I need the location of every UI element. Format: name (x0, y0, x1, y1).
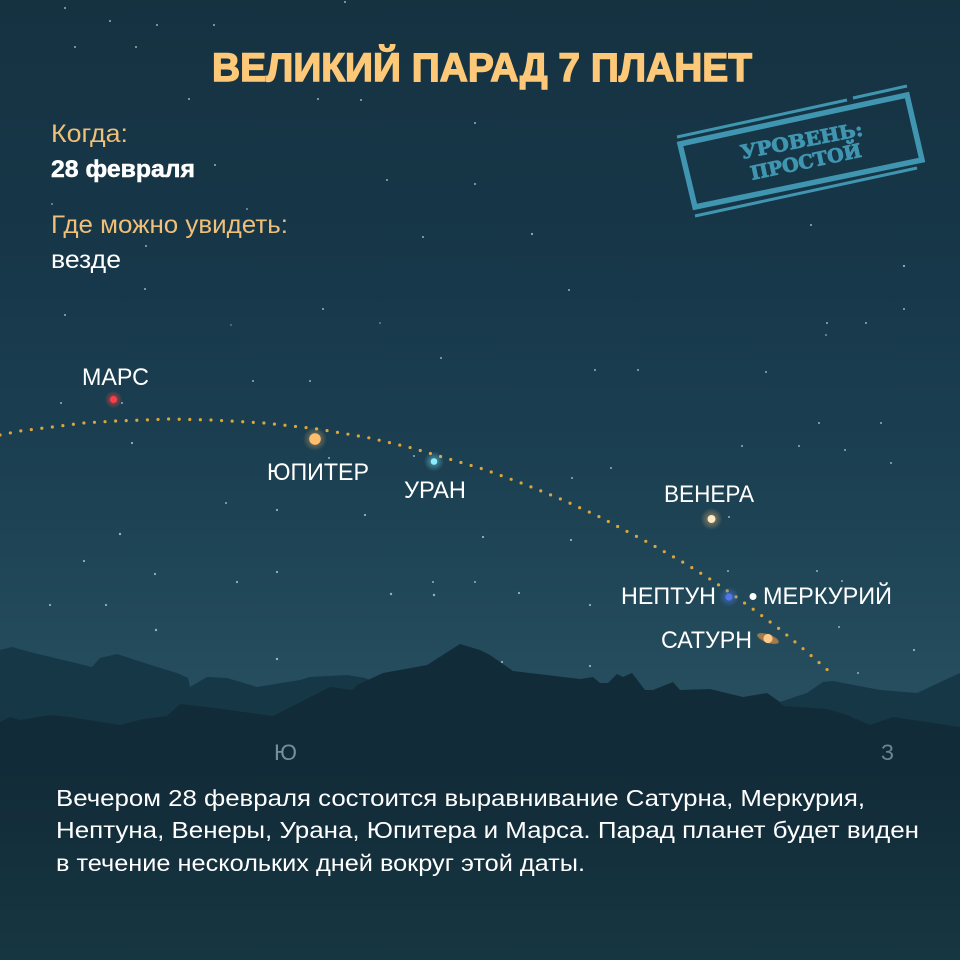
planet: Saturn (661, 627, 780, 654)
where block (51, 211, 288, 274)
label: Neptune: НЕПТУН (621, 583, 716, 610)
description paragraph (56, 785, 919, 876)
label: Jupiter: ЮПИТЕР (267, 459, 369, 486)
mountains: back layer (0, 647, 960, 760)
direction label: south: Ю (274, 740, 297, 765)
when block (51, 120, 195, 183)
planet: Uranus (404, 452, 466, 504)
planet: Neptune (621, 583, 739, 610)
planet: Mercury (750, 582, 892, 610)
when label: Когда: (51, 120, 128, 148)
when value: 28 февраля (51, 156, 195, 183)
label: Mars: МАРС (82, 364, 149, 391)
description paragraph: Нептуна, Венеры, Урана, Юпитера и Марса. Парад планет будет виден (56, 817, 919, 843)
ecliptic dotted arc (0, 419, 831, 673)
where label: Где можно увидеть: (51, 211, 288, 239)
stamp frame (680, 95, 922, 207)
stamp rules (677, 86, 917, 216)
planet: Jupiter (267, 427, 369, 486)
label: Venus: ВЕНЕРА (664, 481, 754, 508)
direction label: west: З (881, 740, 894, 765)
stamp text line 1: УРОВЕНЬ: (739, 119, 865, 164)
description paragraph: в течение нескольких дней вокруг этой даты. (56, 850, 585, 876)
label: Mercury: МЕРКУРИЙ (763, 582, 892, 610)
planet: Venus (664, 481, 754, 530)
planet: Mars (82, 364, 149, 408)
title: ВЕЛИКИЙ ПАРАД 7 ПЛАНЕТ (212, 44, 752, 90)
label: Uranus: УРАН (404, 477, 466, 504)
where value: везде (51, 246, 121, 274)
stamp: level simple (677, 86, 922, 216)
description paragraph: Вечером 28 февраля состоится выравнивание Сатурна, Меркурия, (56, 785, 865, 811)
stamp text line 2: ПРОСТОЙ (748, 138, 864, 185)
stars (49, 1, 915, 674)
label: Saturn: САТУРН (661, 627, 752, 654)
mountains: front layer (0, 644, 960, 960)
